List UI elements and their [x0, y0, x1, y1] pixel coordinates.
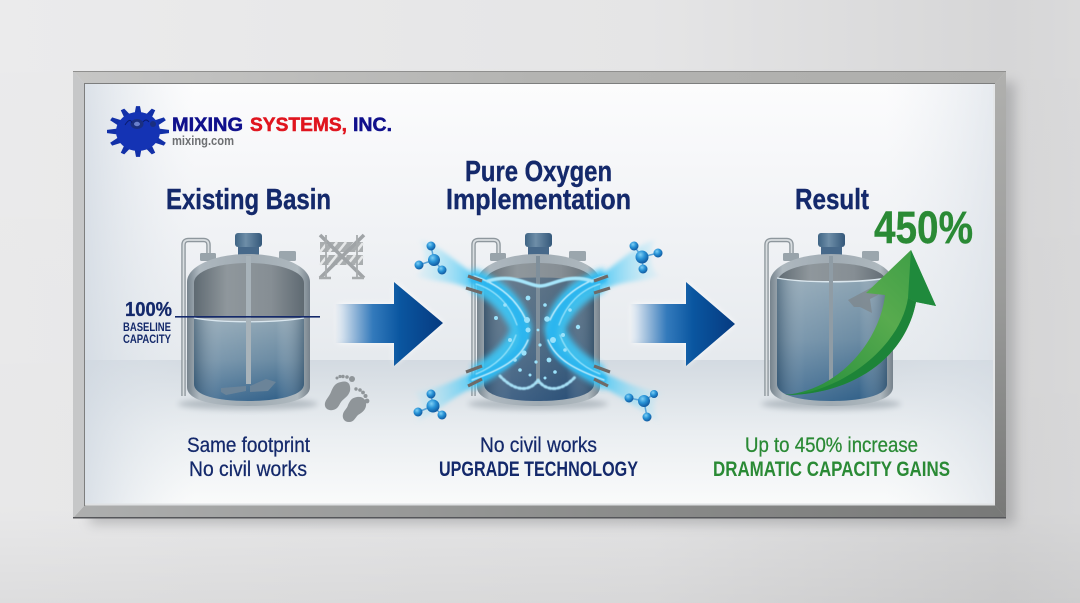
- caption: existing basin: Same footprint: [187, 434, 310, 457]
- label: 100% baseline capacity: [123, 299, 320, 346]
- label: 100% baseline capacity: CAPACITY: [123, 332, 171, 346]
- icon: crossed-out barrier: [319, 235, 364, 278]
- logo wordmark: INC.: [353, 114, 392, 136]
- caption: result: DRAMATIC CAPACITY GAINS: [713, 458, 950, 481]
- heading: Existing Basin: Existing Basin: [166, 184, 331, 216]
- caption: implementation: UPGRADE TECHNOLOGY: [439, 458, 638, 481]
- heading: Pure Oxygen Implementation: Pure Oxygen: [465, 156, 612, 188]
- caption: result: Up to 450% increase: [745, 434, 918, 457]
- mixer impeller: [221, 379, 276, 395]
- label: 100% baseline capacity: 100%: [125, 299, 172, 321]
- tank: result: [761, 233, 901, 410]
- outer fans: [414, 240, 662, 422]
- icon: footprints: [325, 375, 369, 422]
- oxygen jets: [414, 240, 662, 422]
- jets glow: [472, 268, 604, 390]
- heading: Result: Result: [795, 184, 869, 216]
- logo wordmark: MIXING: [172, 114, 243, 136]
- logo wordmark: mixing.com: [172, 134, 234, 148]
- nozzles: [466, 276, 610, 386]
- tank: pure oxygen implementation: [468, 233, 608, 410]
- logo wordmark: SYSTEMS,: [250, 114, 347, 136]
- bubbles: [494, 296, 580, 380]
- caption: implementation: No civil works: [480, 434, 597, 457]
- stat: 450%: 450%: [874, 202, 973, 253]
- icon: oxygen molecule bottom right: [624, 390, 658, 422]
- icon: oxygen molecule top right: [630, 242, 662, 274]
- heading: Pure Oxygen Implementation: [446, 156, 631, 216]
- caption: implementation: [439, 434, 638, 481]
- tank: existing basin: [178, 233, 318, 410]
- logo: Mixing Systems: [107, 106, 392, 157]
- label: 100% baseline capacity: BASELINE: [123, 320, 171, 334]
- caption: existing basin: [187, 434, 310, 481]
- frame shadow: [90, 82, 1015, 524]
- icon: oxygen molecule top left: [414, 242, 446, 274]
- caption: existing basin: No civil works: [189, 458, 307, 481]
- arrow: to implementation: [335, 282, 443, 366]
- caption: result: [713, 434, 950, 481]
- icon: oxygen molecule bottom left: [414, 390, 446, 420]
- heading: Pure Oxygen Implementation: Implementation: [446, 184, 631, 216]
- arrow: to result: [630, 282, 735, 366]
- arrow: growth: [785, 250, 936, 395]
- icon: gear: [107, 106, 169, 157]
- panel: display frame: [73, 71, 1006, 518]
- logo wordmark: [172, 114, 392, 148]
- jets core: [472, 276, 604, 389]
